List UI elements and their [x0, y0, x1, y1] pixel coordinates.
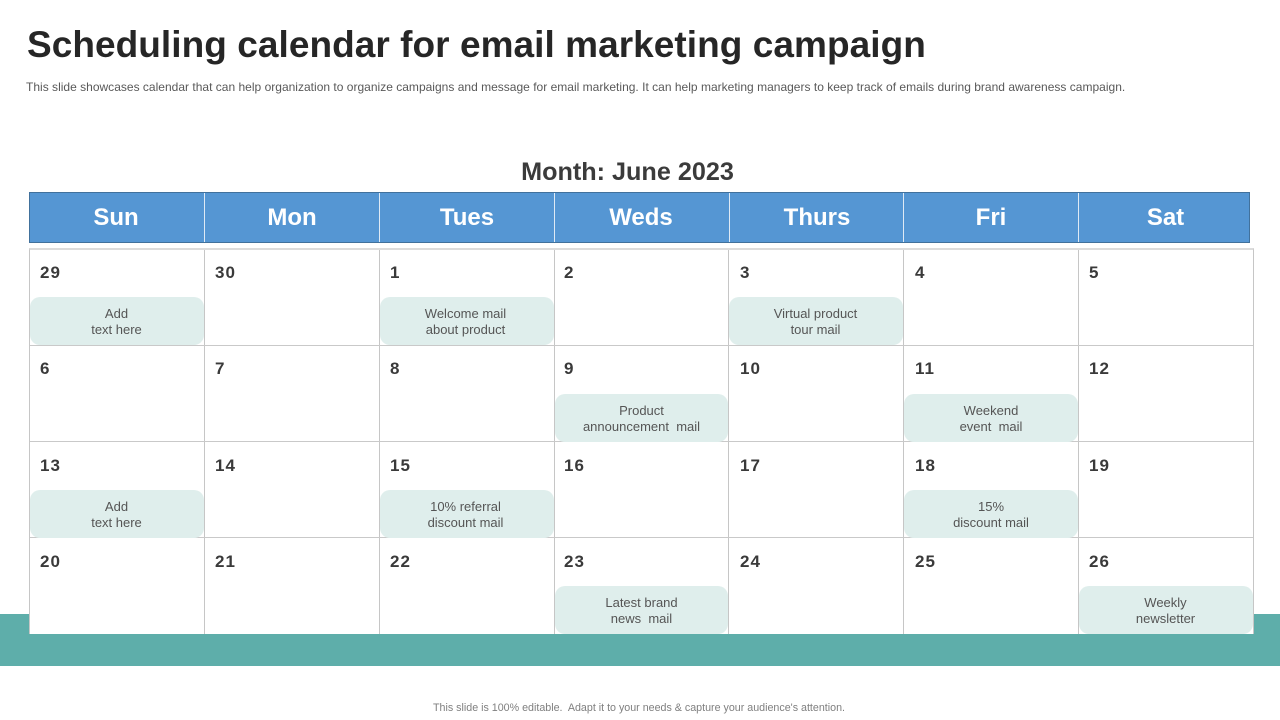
date numbers: 5 — [1089, 263, 1099, 282]
date numbers: 26 — [1089, 552, 1110, 571]
weekday: Fri: Fri — [976, 204, 1006, 231]
event: Latest brand news, 23: news mail — [611, 611, 672, 626]
event: Add text here, 29: Add — [105, 306, 128, 321]
date numbers: 25 — [915, 552, 936, 571]
date numbers — [40, 263, 1110, 571]
date numbers: 24 — [740, 552, 761, 571]
event: Add text here, 29 — [30, 297, 204, 345]
calendar date grid — [29, 248, 1254, 634]
date numbers: 15 — [390, 456, 411, 475]
event: Weekly newsletter, 26: newsletter — [1136, 611, 1195, 626]
event: Virtual product tour, 3: Virtual product — [774, 306, 857, 321]
month heading: Month: June 2023 — [521, 158, 734, 186]
date numbers: 7 — [215, 359, 225, 378]
date numbers: 9 — [564, 359, 574, 378]
event: Product announcement, 9: Product — [619, 403, 664, 418]
event: 15% discount, 18: discount mail — [953, 515, 1029, 530]
event: Add text here, 13: Add — [105, 499, 128, 514]
date numbers: 2 — [564, 263, 574, 282]
date numbers: 22 — [390, 552, 411, 571]
event: Add text here, 13 — [30, 490, 204, 538]
date numbers: 13 — [40, 456, 61, 475]
weekday: Mon: Mon — [267, 204, 317, 231]
weekday: Fri — [904, 193, 1079, 242]
calendar weekday header — [29, 192, 1250, 243]
event: Latest brand news, 23: Latest brand — [605, 595, 678, 610]
event: Weekend event, 11 — [904, 394, 1078, 442]
date numbers: 4 — [915, 263, 925, 282]
weekday: Weds: Weds — [609, 204, 673, 231]
weekday: Tues: Tues — [440, 204, 494, 231]
event: Virtual product tour, 3: tour mail — [791, 322, 840, 337]
weekday: Weds — [555, 193, 730, 242]
date numbers: 16 — [564, 456, 585, 475]
event: Welcome mail, 1: about product — [426, 322, 505, 337]
event: Product announcement, 9 — [555, 394, 728, 442]
date numbers: 30 — [215, 263, 236, 282]
event: Weekend event, 11: event mail — [960, 419, 1022, 434]
date numbers: 21 — [215, 552, 236, 571]
weekday: Thurs: Thurs — [784, 204, 850, 231]
date numbers: 17 — [740, 456, 761, 475]
date numbers: 14 — [215, 456, 236, 475]
event: referral discount, 15: discount mail — [428, 515, 503, 530]
teal footer band — [0, 614, 1280, 666]
event: Add text here, 29: text here — [91, 322, 142, 337]
event: Latest brand news, 23 — [555, 586, 728, 634]
weekday: Thurs — [729, 193, 904, 242]
weekday: Sun: Sun — [93, 204, 139, 231]
date numbers: 12 — [1089, 359, 1110, 378]
event: 15% discount, 18: 15% — [978, 499, 1004, 514]
event: 15% discount, 18 — [904, 490, 1078, 538]
date numbers: 1 — [390, 263, 400, 282]
event: Weekly newsletter, 26 — [1079, 586, 1253, 634]
date numbers: 19 — [1089, 456, 1110, 475]
event: Weekly newsletter, 26: Weekly — [1144, 595, 1187, 610]
weekday: Sat: Sat — [1147, 204, 1184, 231]
event: Welcome mail, 1 — [380, 297, 554, 345]
event: Virtual product tour, 3 — [729, 297, 903, 345]
event: referral discount, 15: 10% referral — [430, 499, 501, 514]
date numbers: 23 — [564, 552, 585, 571]
event: referral discount, 15 — [380, 490, 554, 538]
event: Add text here, 13: text here — [91, 515, 142, 530]
date numbers: 8 — [390, 359, 400, 378]
date numbers: 3 — [740, 263, 750, 282]
subtitle description: This slide showcases calendar that can help organization to organize campaigns and message for email marketing. It can help marketing managers to keep track of emails during brand awareness campaign. — [26, 80, 1125, 94]
date numbers: 29 — [40, 263, 61, 282]
weekday: Tues — [380, 193, 555, 242]
event: Product announcement, 9: announcement mail — [583, 419, 700, 434]
date numbers: 18 — [915, 456, 936, 475]
title: Scheduling calendar for email marketing campaign — [27, 24, 926, 65]
event: Weekend event, 11: Weekend — [964, 403, 1018, 418]
date numbers: 20 — [40, 552, 61, 571]
weekday: Sun — [30, 193, 205, 242]
date numbers: 11 — [915, 359, 935, 378]
footer note: This slide is 100% editable. Adapt it to your needs & capture your audience's attention. — [433, 702, 845, 714]
weekday: Mon — [205, 193, 380, 242]
event: Welcome mail, 1: Welcome mail — [425, 306, 506, 321]
date numbers: 6 — [40, 359, 50, 378]
date numbers: 10 — [740, 359, 761, 378]
